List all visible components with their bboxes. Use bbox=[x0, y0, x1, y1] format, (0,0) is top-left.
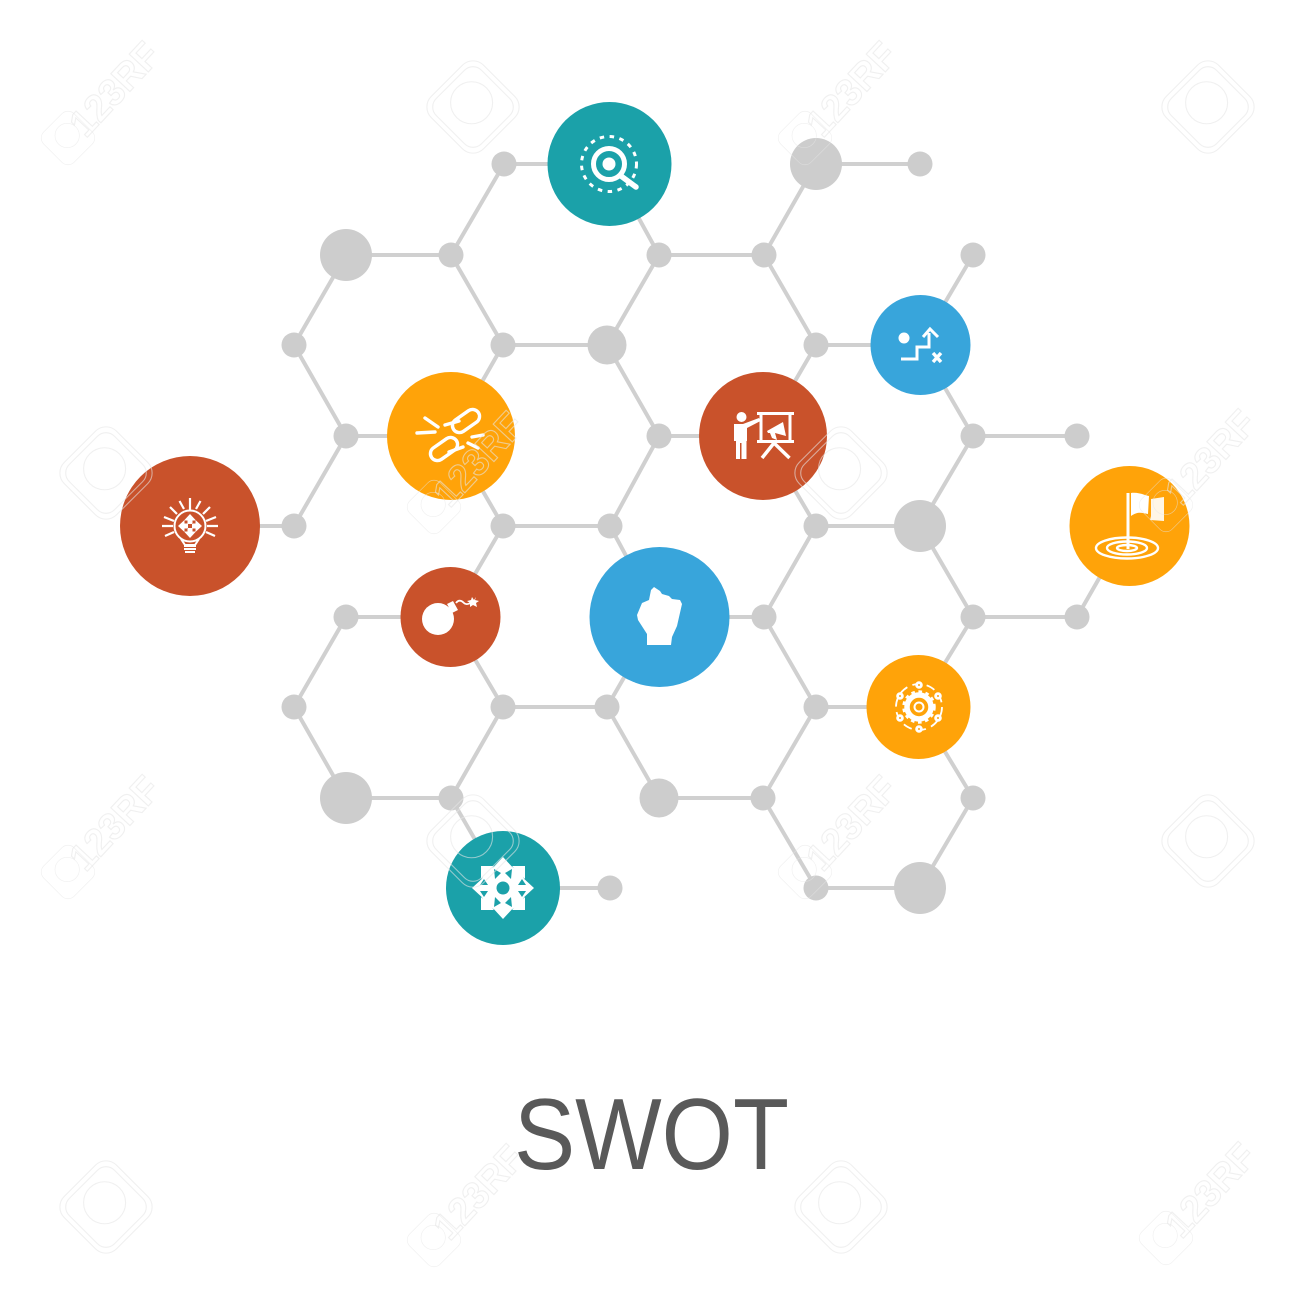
hexagon network connector lines bbox=[190, 164, 1129, 888]
watermark overlay: 123RF bbox=[1158, 1136, 1265, 1246]
badge: broken chain link bbox=[387, 372, 515, 500]
badge: steps strategy bbox=[870, 295, 970, 395]
title: SWOT bbox=[514, 1079, 789, 1191]
watermark overlay: 123RF bbox=[799, 35, 906, 145]
badge: presenter at board bbox=[699, 372, 827, 500]
watermark overlay: 123RF bbox=[62, 769, 169, 879]
watermark overlay: 123RF bbox=[1158, 403, 1265, 513]
watermark overlay: 123RF bbox=[426, 1138, 533, 1248]
watermark overlay: 123RF bbox=[62, 35, 169, 145]
watermark overlay: 123RF bbox=[426, 405, 533, 515]
badge: flag on target bbox=[1070, 466, 1190, 586]
badge: bomb bbox=[400, 567, 500, 667]
badge: gear with outward arrows bbox=[446, 831, 560, 945]
watermark overlay: 123RF bbox=[799, 769, 906, 879]
badge: gears in dashed ring bbox=[866, 655, 970, 759]
badge: raised fist bbox=[590, 547, 730, 687]
badge: magnifier search bbox=[548, 102, 672, 226]
badge: lightbulb with arrows bbox=[120, 456, 260, 596]
network nodes bbox=[282, 138, 1090, 914]
